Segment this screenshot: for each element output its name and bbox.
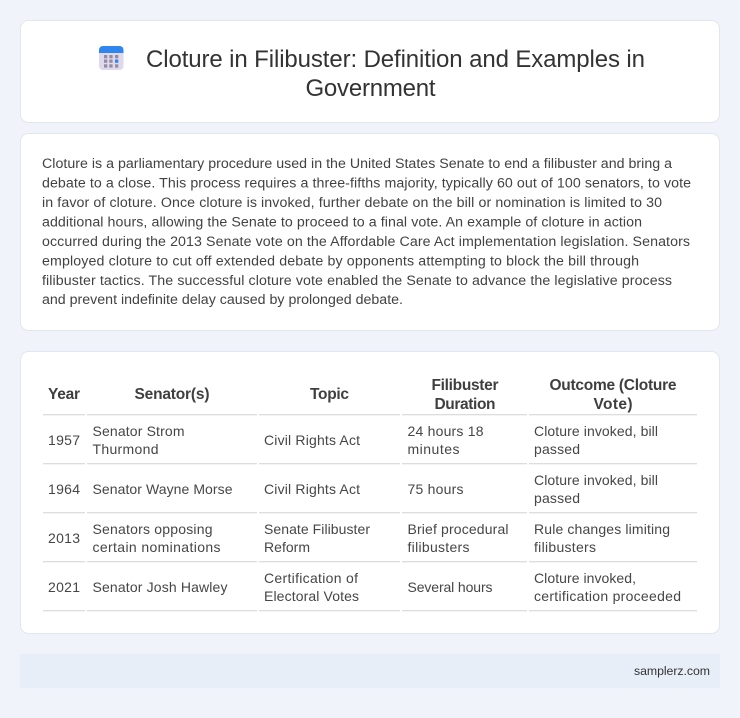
table row: 2013 <box>48 521 670 555</box>
table header: Topic <box>310 386 349 403</box>
panel: title <box>20 20 720 122</box>
table row: 1957: Senator Strom <box>92 423 184 439</box>
table row: 1964: Senator Wayne Morse <box>92 481 233 497</box>
table row: 2021: 2021 <box>48 579 80 595</box>
table row: 1957: Cloture invoked, bill <box>534 423 658 439</box>
table row: 2021: Electoral Votes <box>264 588 359 604</box>
table row: 2013: 2013 <box>48 530 80 546</box>
table row: 2013: Rule changes limiting <box>534 521 670 537</box>
table row: 1957: 1957 <box>48 432 80 448</box>
table header: Vote) <box>594 396 632 413</box>
table header: Duration <box>434 396 496 413</box>
title text <box>146 46 645 102</box>
table row: 2013: certain nominations <box>92 539 220 555</box>
description text: employed cloture to cut off extended debate by opponents attempting to block the bill through <box>42 254 639 270</box>
title text: Cloture in Filibuster: Definition and Examples in <box>146 46 645 73</box>
table row: 1964: passed <box>534 490 580 506</box>
description text: filibuster tactics. The successful cloture vote enabled the Senate to advance the legislative process <box>42 273 672 289</box>
table row: 1964: Cloture invoked, bill <box>534 472 658 488</box>
table row: 2013: Reform <box>264 539 310 555</box>
table row: 1964 <box>48 472 658 506</box>
panel: description <box>20 134 720 330</box>
table header: Filibuster <box>432 377 498 394</box>
table row: 1964: 1964 <box>48 481 80 497</box>
description text: in favor of cloture. Once cloture is invoked, further debate on the bill or nomination is limited to 30 <box>42 195 662 211</box>
icon: calendar <box>99 46 124 70</box>
description text: and prevent indefinite delay caused by prolonged debate. <box>42 292 403 308</box>
table row: 1957 <box>48 423 658 457</box>
table row: 2021: Several hours <box>408 579 492 595</box>
table header: Senator(s) <box>134 386 210 403</box>
table row: 2021: certification proceeded <box>534 588 681 604</box>
table row: 1957: 24 hours 18 <box>408 423 484 439</box>
description text: occurred during the 2013 Senate vote on the Affordable Care Act implementation legislation. Senators <box>42 234 690 250</box>
table row: 1964: Civil Rights Act <box>264 481 360 497</box>
description text: debate to a close. This process requires a three-fifths majority, typically 60 out of 100 senators, to vote <box>42 176 691 192</box>
footer <box>20 654 720 688</box>
table row: 2013: Senators opposing <box>92 521 212 537</box>
table header: Year <box>48 386 80 403</box>
table header <box>48 377 677 413</box>
table row: 1957: Civil Rights Act <box>264 432 360 448</box>
table row: 1964: 75 hours <box>408 481 464 497</box>
table header: Outcome (Cloture <box>550 377 677 394</box>
table row: 2021: Cloture invoked, <box>534 570 636 586</box>
table row: 2021 <box>48 570 681 604</box>
table row: 2021: Certification of <box>264 570 358 586</box>
table row: 2013: filibusters <box>408 539 470 555</box>
description text: additional hours, allowing the Senate to proceed to a final vote. An example of cloture in action <box>42 214 642 230</box>
table row: 2013: filibusters <box>534 539 596 555</box>
table row: 1957: minutes <box>408 441 460 457</box>
panel: table <box>20 352 720 634</box>
table row: 1957: passed <box>534 441 580 457</box>
description text: Cloture is a parliamentary procedure used in the United States Senate to end a filibuster and bring a <box>42 156 672 172</box>
table row: 2021: Senator Josh Hawley <box>92 579 228 595</box>
table row: 2013: Senate Filibuster <box>264 521 370 537</box>
footer: samplerz.com <box>634 664 710 678</box>
title text: Government <box>306 75 436 102</box>
table row: 2013: Brief procedural <box>408 521 508 537</box>
table row: 1957: Thurmond <box>92 441 158 457</box>
description text <box>42 156 691 308</box>
